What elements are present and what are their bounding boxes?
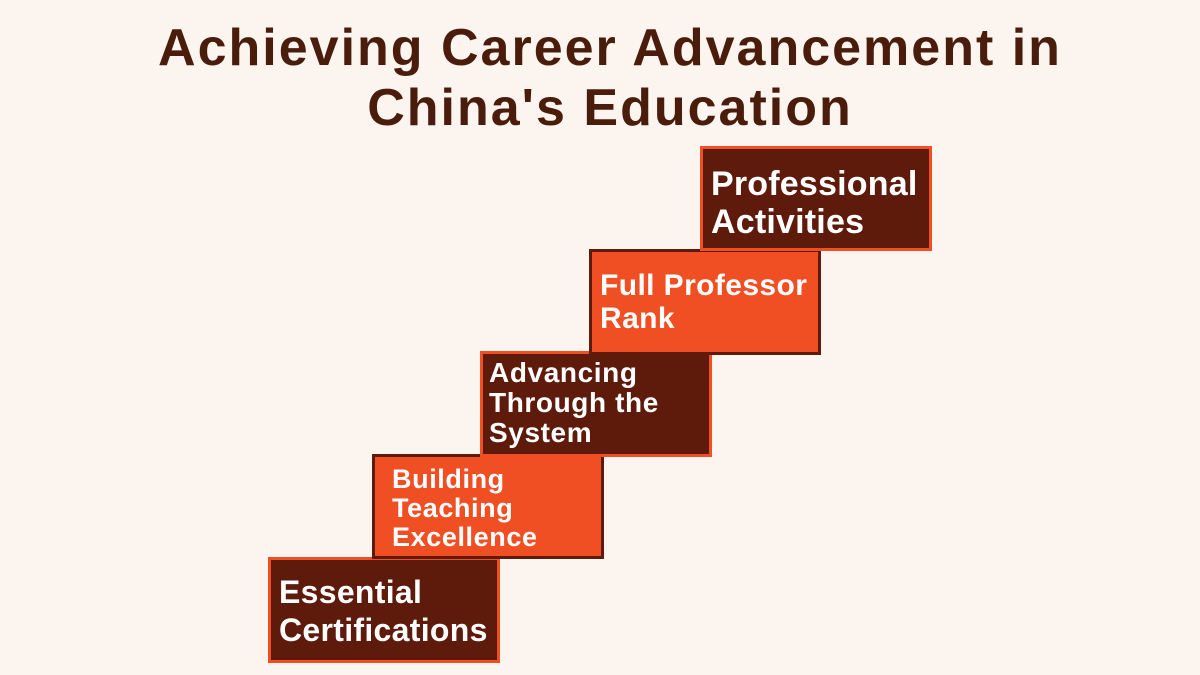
step 2: Building Teaching Excellence: Teaching [392, 493, 513, 523]
title [158, 19, 1062, 137]
step 4: Full Professor Rank [589, 249, 821, 355]
step 3: Advancing Through the System: System [489, 417, 592, 448]
step 5: Professional Activities: Activities [711, 203, 864, 241]
step 1: Essential Certifications [268, 557, 500, 663]
step 2: Building Teaching Excellence: Building [392, 464, 505, 494]
step 2: Building Teaching Excellence [372, 454, 604, 559]
title: China's Education [367, 79, 853, 137]
title: Achieving Career Advancement in [158, 19, 1062, 77]
step 3: Advancing Through the System [480, 351, 712, 457]
step 1: Essential Certifications: Certifications [279, 612, 488, 648]
step 4: Full Professor Rank: Full Professor [600, 269, 807, 302]
step 3: Advancing Through the System: Through the [489, 387, 659, 418]
step 5: Professional Activities: Professional [711, 165, 917, 203]
step 4: Full Professor Rank: Rank [600, 302, 675, 335]
step 3: Advancing Through the System: Advancing [489, 357, 638, 388]
step 2: Building Teaching Excellence: Excellence [392, 522, 538, 552]
step 5: Professional Activities [700, 146, 932, 251]
step 1: Essential Certifications: Essential [279, 574, 422, 610]
